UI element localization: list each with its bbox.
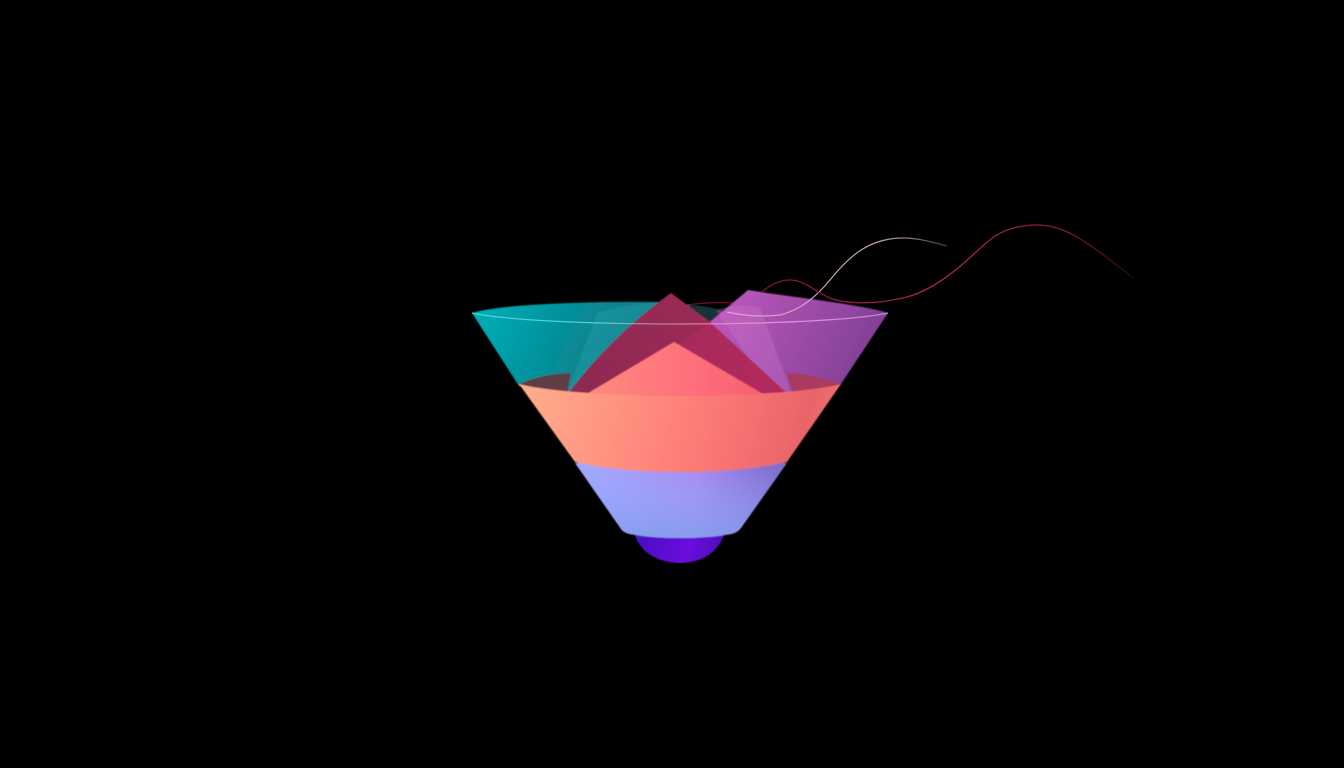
lavender cone band: [575, 455, 787, 538]
rim highlight of top cone: [472, 313, 888, 324]
purple half: [710, 290, 888, 400]
curve: red thread behind funnel: [687, 303, 735, 305]
back rim of middle cone: [519, 373, 841, 400]
salmon inner peak: [585, 342, 765, 403]
translucent purple panel: [716, 306, 793, 396]
shadowed right interior: [787, 373, 841, 400]
crimson folded shape: [566, 293, 790, 402]
crimson darker fold left of centre: [566, 293, 709, 400]
curve: red thread: [762, 225, 1132, 303]
dark interior gap: [660, 305, 724, 345]
curve: pale thread: [727, 238, 947, 316]
translucent teal panel: [566, 302, 690, 396]
shadowed left interior: [519, 373, 571, 400]
funnel body: [472, 290, 888, 563]
salmon cone band: [519, 384, 841, 472]
top cone: teal and purple: [472, 290, 888, 400]
bottom sphere: [635, 530, 724, 563]
teal half: [472, 302, 700, 400]
